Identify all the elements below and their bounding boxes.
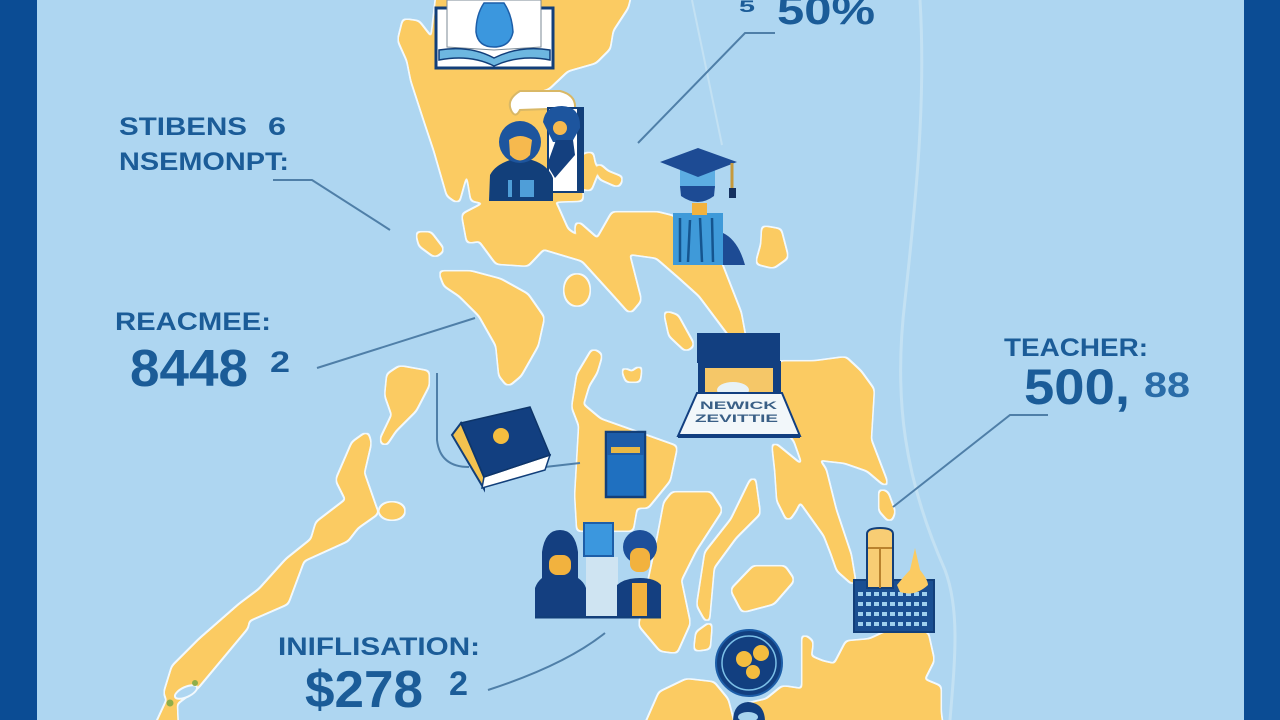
leader line: book connector [437, 373, 580, 467]
speech bubble [510, 91, 575, 115]
island: Palawan tip islet [380, 503, 404, 519]
islet: west of Panay [391, 512, 393, 514]
island: central Luzon and Bicol [463, 202, 745, 340]
icon: laptop [678, 333, 800, 438]
leader line: teacher stat [893, 415, 1048, 507]
island: Calamian group [381, 367, 428, 445]
island: small north strip [597, 163, 622, 186]
board behind students [548, 108, 583, 192]
stat: students label: 6 [268, 113, 286, 141]
laptop screen text: NEWICK [700, 400, 777, 412]
stat: students label [119, 113, 289, 176]
icon: closed book [452, 407, 550, 489]
stat: reach figure [115, 308, 290, 398]
stat: reach figure: 8448 [130, 340, 248, 398]
icon: graduate with cap [660, 148, 745, 265]
island: small west islet [417, 233, 443, 256]
leader line: top right stat [638, 33, 775, 143]
map of the Philippines [145, 0, 945, 720]
stat: students label: NSEMONPT: [119, 148, 289, 176]
icon: blue folder panel [606, 432, 645, 497]
island: Marinduque [565, 275, 589, 305]
stat: reach figure: 2 [270, 346, 290, 379]
island: small central islet [622, 366, 641, 381]
island: Negros [640, 493, 721, 652]
leader line: students stat [273, 180, 390, 230]
icon: students with speech bubble [489, 91, 583, 201]
icon: globe on stand [716, 630, 782, 720]
island: curl islet [880, 490, 894, 521]
island: Mindanao west [635, 680, 740, 720]
small blue screen [584, 523, 613, 556]
icon: laptop: ZEVITTIE [695, 413, 778, 425]
leader line: inflation stat [488, 633, 605, 690]
island: Catanduanes [757, 227, 787, 267]
stat: inflation figure [278, 633, 480, 719]
head band [680, 170, 715, 188]
stat: students label: STIBENS [119, 113, 247, 141]
stat: teacher figure: 88 [1144, 366, 1190, 405]
icon: teachers at blackboard [535, 523, 661, 618]
island: Leyte [773, 443, 855, 585]
leader line: reach stat [317, 318, 475, 368]
tassel [730, 163, 734, 190]
neck [692, 203, 707, 215]
island: Mindanao east [735, 633, 945, 720]
island: right of students [583, 153, 596, 190]
island: Mindoro [440, 272, 543, 385]
stat: inflation figure: $278 [305, 661, 423, 719]
island: Panay [573, 350, 676, 530]
centre pale panel [586, 557, 618, 617]
left teacher [535, 530, 586, 618]
icon: open book with backpack [436, 0, 553, 68]
mortarboard [660, 148, 737, 177]
stat: inflation figure: 2 [449, 665, 468, 703]
left border bar [0, 0, 37, 720]
stat: teacher figure: TEACHER: [1004, 334, 1148, 362]
back student [543, 106, 580, 142]
right teacher [617, 578, 661, 618]
stat: teacher figure [1004, 334, 1190, 415]
island: northern Luzon [399, 0, 636, 203]
front student [489, 160, 553, 201]
stat: teacher figure: 500, [1024, 359, 1130, 415]
right border bar [1244, 0, 1280, 720]
island: Bohol [732, 567, 793, 611]
island: Palawan [145, 433, 377, 720]
island: Cebu [698, 477, 759, 623]
sleeve [723, 233, 745, 265]
island: Siquijor [695, 623, 711, 650]
stat: inflation figure: INIFLISATION: [278, 633, 480, 661]
island: Samar [780, 358, 888, 487]
stat: top right percentage [739, 0, 875, 33]
island: thin strip [576, 222, 602, 250]
island: Masbate [665, 312, 693, 350]
gown [673, 213, 723, 265]
stat: reach figure: REACMEE: [115, 308, 271, 336]
icon: tower and grid building [854, 528, 934, 632]
Palawan tip detail [166, 680, 199, 706]
